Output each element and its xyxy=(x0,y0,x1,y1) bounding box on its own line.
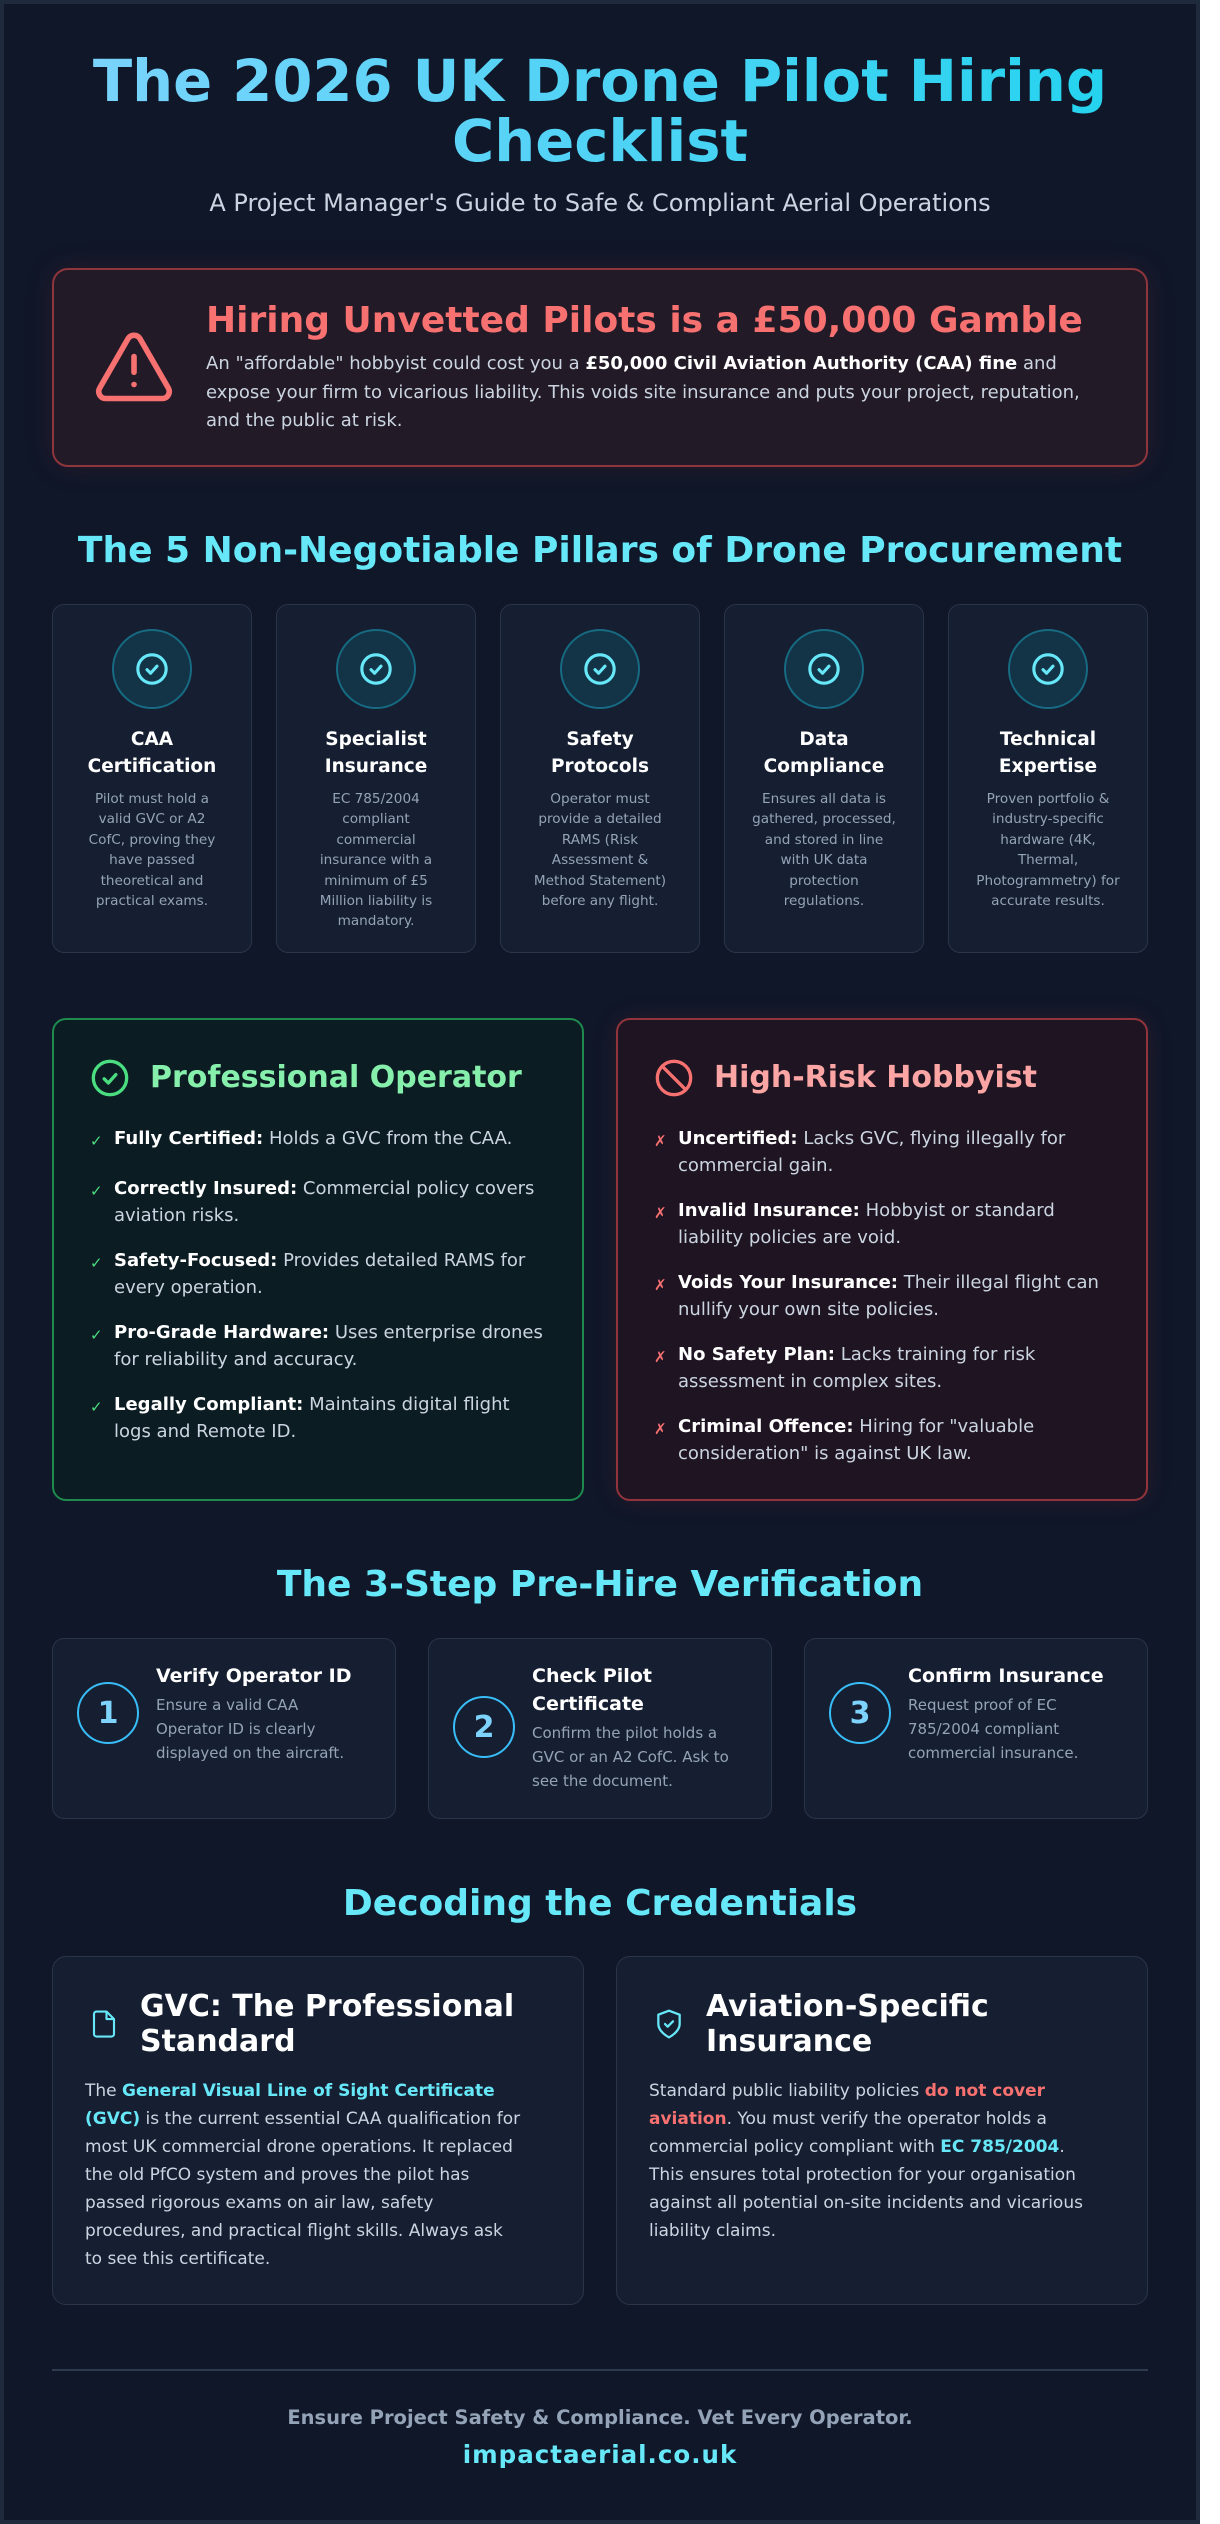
panel: professional operator: Professional Operator xyxy=(150,1060,522,1095)
panel: professional operator: logs and Remote ID. xyxy=(114,1421,296,1442)
panel: high-risk hobbyist: ✗ xyxy=(654,1420,667,1438)
card: GVC: to see this certificate. xyxy=(85,2249,270,2269)
pillar: Technical Expertise: Technical xyxy=(1000,729,1096,750)
step 3: Confirm Insurance xyxy=(908,1665,1104,1687)
panel: professional operator: ✓ xyxy=(90,1182,103,1200)
pillar: Technical Expertise: Expertise xyxy=(999,756,1097,777)
panel: professional operator: Fully Certified: Holds a GVC from the CAA. xyxy=(114,1128,512,1149)
step 2: 2 xyxy=(474,1710,494,1745)
panel: professional operator: ✓ xyxy=(90,1132,103,1150)
heading: steps: The 3-Step Pre-Hire Verification xyxy=(277,1564,923,1605)
pillar: Data Compliance: Compliance xyxy=(764,756,884,777)
panel: high-risk hobbyist: Invalid Insurance: Hobbyist or standard xyxy=(678,1200,1055,1221)
panel: professional operator: Legally Compliant: Maintains digital flight xyxy=(114,1394,510,1415)
panel: high-risk hobbyist: nullify your own site policies. xyxy=(678,1299,939,1320)
pillar: Data Compliance xyxy=(724,604,924,953)
alert text: An "affordable" hobbyist could cost you a £50,000 Civil Aviation Authority (CAA) fine and expose your firm to vicarious liability. This voids site insurance and puts your project, reputation, and the public at risk. xyxy=(206,353,1080,431)
panel: high-risk hobbyist: ✗ xyxy=(654,1204,667,1222)
pillar: Safety Protocols: Safety xyxy=(566,729,634,750)
pillar: Safety Protocols: Operator must provide a detailed RAMS (Risk Assessment & Method Statement) before any flight. xyxy=(534,791,666,909)
panel: high-risk hobbyist: ✗ xyxy=(654,1348,667,1366)
step 3: Request proof of EC 785/2004 compliant commercial insurance. xyxy=(908,1696,1078,1762)
card: GVC xyxy=(52,1956,584,2305)
panel: high-risk hobbyist: Criminal Offence: Hiring for "valuable xyxy=(678,1416,1034,1437)
title: The 2026 UK Drone Pilot Hiring xyxy=(93,48,1107,115)
panel: professional operator: ✓ xyxy=(90,1326,103,1344)
icon: warning triangle xyxy=(96,332,172,402)
pillar: CAA Certification: CAA xyxy=(131,729,173,750)
panel: professional operator: Safety-Focused: Provides detailed RAMS for every operation. xyxy=(114,1250,525,1298)
step 2 xyxy=(428,1638,772,1819)
step 1: 1 xyxy=(98,1696,118,1731)
panel: high-risk hobbyist: No Safety Plan: Lacks training for risk xyxy=(678,1344,1035,1365)
panel: high-risk hobbyist: commercial gain. xyxy=(678,1155,833,1176)
panel: comparison xyxy=(52,1014,1152,1506)
pillar: Safety Protocols: Protocols xyxy=(551,756,649,777)
title: Checklist xyxy=(452,108,748,175)
pillar: Technical Expertise: Proven portfolio & industry-specific hardware (4K, Thermal, Photogrammetry) for accurate results. xyxy=(976,791,1120,909)
footer url: impactaerial.co.uk xyxy=(463,2440,737,2469)
panel: pillars xyxy=(52,604,1148,953)
panel: professional operator: ✓ xyxy=(90,1254,103,1272)
pillar: CAA Certification xyxy=(52,604,252,953)
card: insurance: commercial policy compliant with EC 785/2004. xyxy=(649,2137,1065,2157)
panel: credentials xyxy=(52,1956,1148,2305)
card: GVC: procedures, and practical flight skills. Always ask xyxy=(85,2221,503,2241)
panel: high-risk hobbyist: ✗ xyxy=(654,1132,667,1150)
panel: professional operator: ✓ xyxy=(90,1398,103,1416)
panel: professional operator xyxy=(52,1018,584,1501)
step 1: Verify Operator ID xyxy=(156,1665,352,1687)
pillar: Specialist Insurance: Specialist xyxy=(325,729,427,750)
card: GVC: The General Visual Line of Sight Certificate xyxy=(85,2081,495,2101)
panel: high-risk hobbyist: Voids Your Insurance: Their illegal flight can xyxy=(678,1272,1099,1293)
card: GVC: (GVC) is the current essential CAA qualification for xyxy=(85,2109,520,2129)
heading: credentials: Decoding the Credentials xyxy=(343,1883,857,1924)
card: insurance xyxy=(616,1956,1148,2305)
panel: high-risk hobbyist: assessment in complex sites. xyxy=(678,1371,942,1392)
panel: professional operator: Pro-Grade Hardware: Uses enterprise drones for reliability and accuracy. xyxy=(114,1322,543,1370)
panel: high-risk hobbyist: consideration" is against UK law. xyxy=(678,1443,972,1464)
card: insurance: Aviation-Specific xyxy=(706,1989,989,2024)
step 3: 3 xyxy=(850,1696,870,1731)
pillar: Specialist Insurance: EC 785/2004 compliant commercial insurance with a minimum of £5 Million liability is mandatory. xyxy=(320,791,432,929)
step 1: Ensure a valid CAA Operator ID is clearly displayed on the aircraft. xyxy=(156,1696,344,1762)
footer tagline: Ensure Project Safety & Compliance. Vet Every Operator. xyxy=(287,2406,913,2429)
card: insurance: against all potential on-site incidents and vicarious xyxy=(649,2193,1083,2213)
card: GVC: passed rigorous exams on air law, safety xyxy=(85,2193,433,2213)
panel: high-risk hobbyist: High-Risk Hobbyist xyxy=(714,1060,1037,1095)
card: insurance: aviation. You must verify the operator holds a xyxy=(649,2109,1047,2129)
step 2: Check Pilot xyxy=(532,1665,652,1687)
panel: high-risk hobbyist: ✗ xyxy=(654,1276,667,1294)
card: insurance: Insurance xyxy=(706,2024,872,2059)
card: insurance: This ensures total protection for your organisation xyxy=(649,2165,1076,2185)
step 3 xyxy=(804,1638,1148,1819)
card: insurance: Standard public liability policies do not cover xyxy=(649,2081,1045,2101)
pillar: Safety Protocols xyxy=(500,604,700,953)
pillar: Specialist Insurance xyxy=(276,604,476,953)
pillar: Technical Expertise xyxy=(948,604,1148,953)
pillar: Data Compliance: Ensures all data is gathered, processed, and stored in line with UK data protection regulations. xyxy=(752,791,896,909)
card: GVC: GVC: The Professional Standard xyxy=(140,1989,514,2059)
pillar: Specialist Insurance: Insurance xyxy=(325,756,427,777)
pillar: Data Compliance: Data xyxy=(799,729,849,750)
card: GVC: most UK commercial drone operations. It replaced xyxy=(85,2137,513,2157)
heading: pillars: The 5 Non-Negotiable Pillars of Drone Procurement xyxy=(78,530,1122,571)
alert text: Hiring Unvetted Pilots is a £50,000 Gamble xyxy=(206,300,1083,341)
card: GVC: the old PfCO system and proves the pilot has xyxy=(85,2165,469,2185)
step 1 xyxy=(52,1638,396,1819)
card: insurance: liability claims. xyxy=(649,2221,776,2241)
subtitle: A Project Manager's Guide to Safe & Compliant Aerial Operations xyxy=(209,189,991,217)
step 2: Confirm the pilot holds a GVC or an A2 CofC. Ask to see the document. xyxy=(532,1724,729,1790)
pillar: CAA Certification: Pilot must hold a valid GVC or A2 CofC, proving they have passed theoretical and practical exams. xyxy=(89,791,215,909)
alert box xyxy=(52,268,1148,467)
title xyxy=(52,52,1148,173)
panel: professional operator: Correctly Insured: Commercial policy covers aviation risks. xyxy=(114,1178,534,1226)
pillar: CAA Certification: Certification xyxy=(88,756,216,777)
panel: high-risk hobbyist: Uncertified: Lacks GVC, flying illegally for xyxy=(678,1128,1065,1149)
panel: steps xyxy=(52,1638,1148,1819)
alert text xyxy=(206,300,1083,431)
step 2: Certificate xyxy=(532,1693,644,1715)
panel: high-risk hobbyist xyxy=(616,1018,1148,1501)
panel: high-risk hobbyist: liability policies are void. xyxy=(678,1227,901,1248)
